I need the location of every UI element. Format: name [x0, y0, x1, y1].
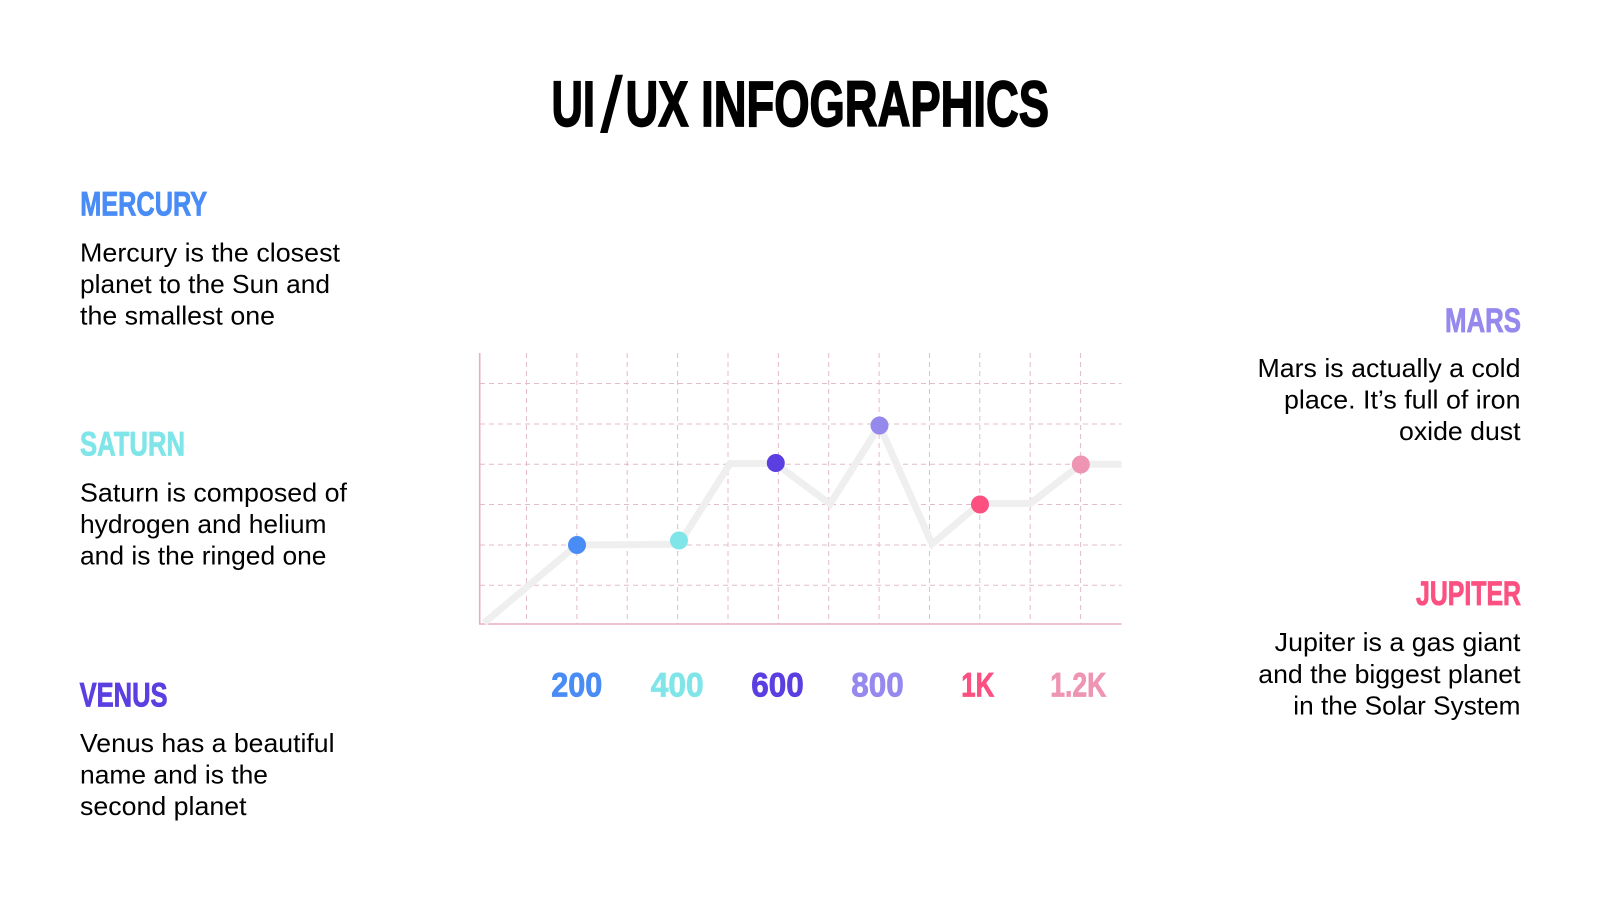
text: jupiter description: in the Solar System [1293, 690, 1520, 720]
panel: saturn [80, 426, 348, 570]
text: mars description: Mars is actually a cold [1258, 353, 1520, 383]
title: UI [552, 68, 595, 140]
data points [568, 416, 1090, 554]
heading: mercury: MERCURY [80, 185, 207, 223]
x axis labels [551, 667, 1107, 705]
heading: mars: MARS [1445, 302, 1521, 340]
x axis labels: 1.2K [1050, 667, 1107, 705]
x axis labels: 800 [851, 667, 904, 705]
text: venus description: Venus has a beautiful [80, 728, 334, 758]
panel: venus [80, 677, 334, 821]
x axis labels: 200 [551, 667, 602, 705]
panel: jupiter [1258, 575, 1521, 720]
heading: saturn: SATURN [80, 426, 185, 464]
title: UX INFOGRAPHICS [626, 68, 1049, 140]
text: mercury description: Mercury is the closest [80, 237, 341, 267]
text: mars description: place. It’s full of iron [1284, 385, 1520, 415]
text: venus description: name and is the [80, 760, 268, 790]
panel: mercury [80, 185, 341, 330]
text: venus description: second planet [80, 791, 247, 821]
title: / [601, 62, 623, 148]
text: mars description: oxide dust [1399, 416, 1521, 446]
x axis labels: 400 [651, 667, 704, 705]
data line [484, 426, 1122, 623]
chart axes [480, 353, 1122, 624]
text: mercury description: planet to the Sun and [80, 269, 330, 299]
heading: jupiter: JUPITER [1416, 575, 1521, 613]
text: mercury description: the smallest one [80, 300, 275, 330]
x axis labels: 600 [751, 667, 804, 705]
text: saturn description: and is the ringed one [80, 540, 326, 570]
text: jupiter description: Jupiter is a gas giant [1275, 627, 1521, 657]
text: saturn description: Saturn is composed of [80, 477, 348, 507]
heading: venus: VENUS [80, 677, 168, 715]
text: jupiter description: and the biggest planet [1258, 659, 1521, 689]
text: saturn description: hydrogen and helium [80, 509, 326, 539]
panel: mars [1258, 302, 1521, 446]
line chart [480, 353, 1122, 705]
x axis labels: 1K [961, 667, 995, 705]
